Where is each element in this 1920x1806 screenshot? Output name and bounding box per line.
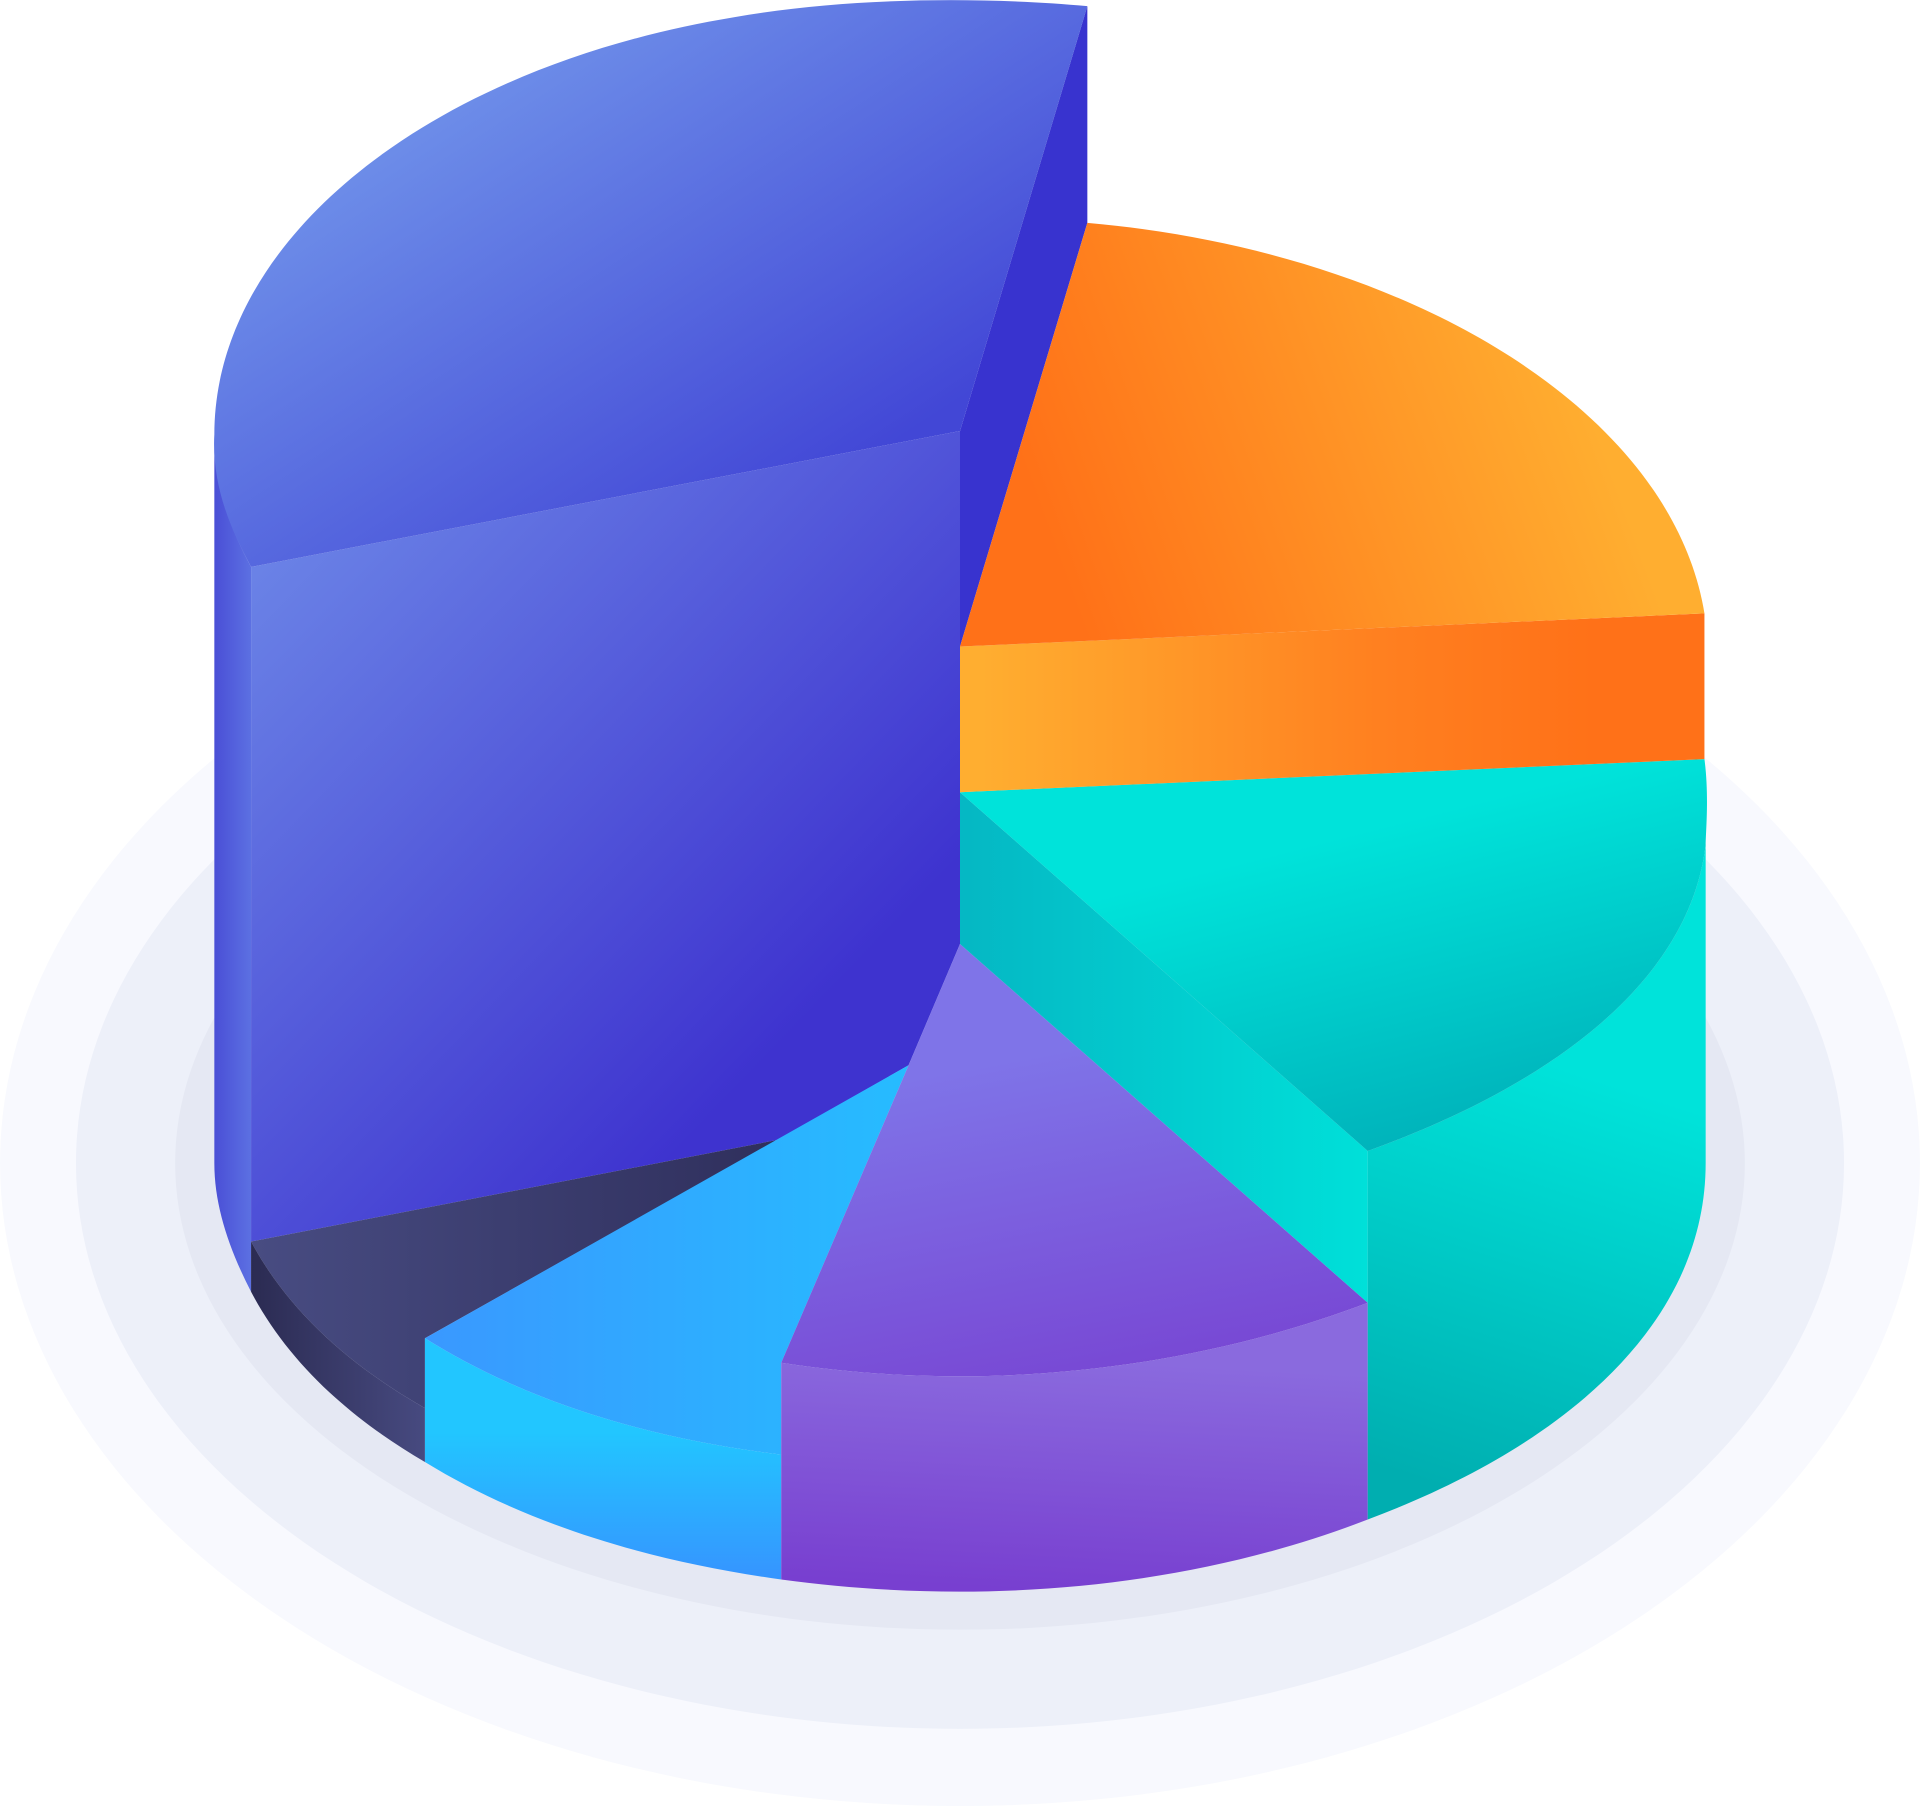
- slice: purple: [781, 944, 1368, 1592]
- slice: indigo: [214, 0, 1087, 1292]
- slice: orange: [960, 223, 1704, 792]
- background rings: [0, 520, 1920, 1806]
- slice: teal: [960, 759, 1707, 1519]
- slice: sky blue: [425, 1065, 909, 1579]
- slice: dark navy: [251, 1140, 778, 1462]
